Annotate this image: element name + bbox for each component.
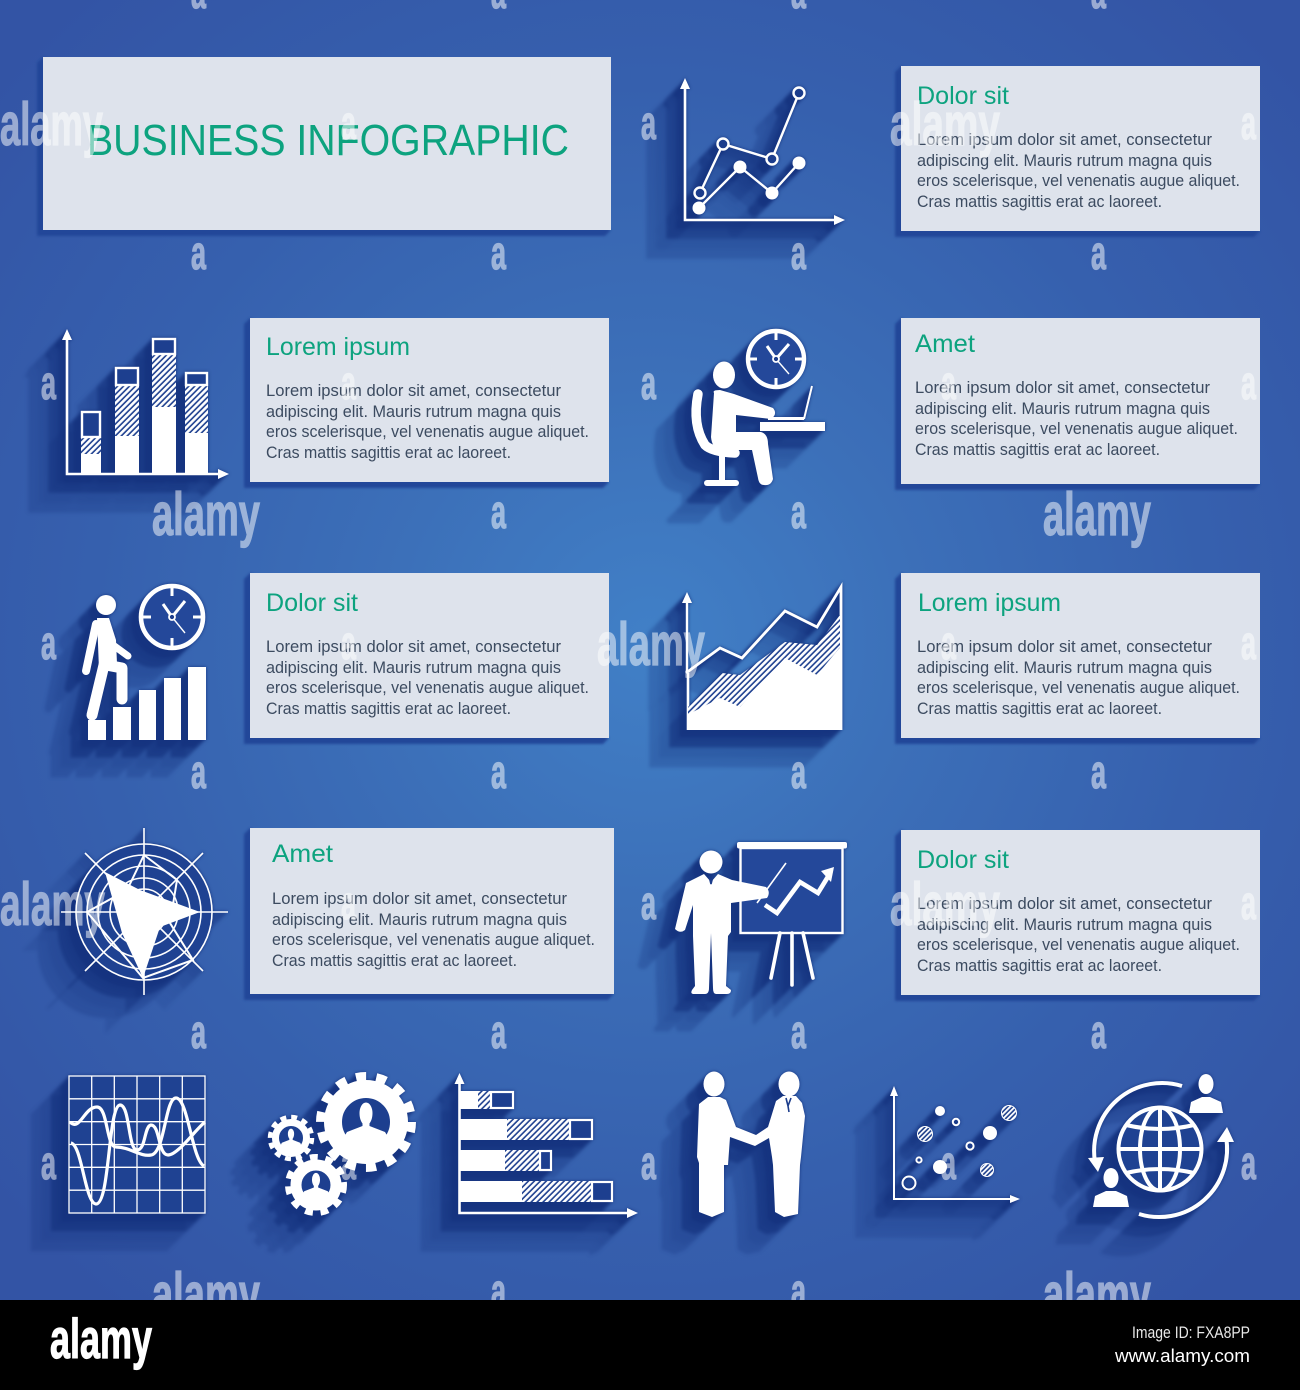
body text: adipiscing elit. Mauris rutrum magna quis: [272, 911, 567, 929]
body text: eros scelerisque, vel venenatis augue aliquet.: [917, 679, 1240, 697]
panel: dolor sit bottom right: [895, 830, 1260, 1001]
body text: Cras mattis sagittis erat ac laoreet.: [266, 700, 511, 718]
watermark: stock overlay: a: [341, 356, 356, 409]
body text: eros scelerisque, vel venenatis augue aliquet.: [915, 420, 1238, 438]
watermark: stock overlay: a: [1091, 1005, 1106, 1058]
body text: eros scelerisque, vel venenatis augue aliquet.: [917, 936, 1240, 954]
body text: [917, 638, 1240, 718]
icon: presenter with flip chart: [675, 842, 847, 994]
watermark: stock overlay: alamy: [152, 481, 260, 548]
body text: eros scelerisque, vel venenatis augue aliquet.: [266, 423, 589, 441]
panel: lorem ipsum right: [895, 573, 1260, 744]
body text: adipiscing elit. Mauris rutrum magna quis: [266, 403, 561, 421]
icon: line chart: [680, 78, 845, 225]
body text: Lorem ipsum dolor sit amet, consectetur: [917, 638, 1212, 656]
watermark: stock overlay: a: [1241, 1136, 1256, 1189]
heading: Dolor sit: [917, 82, 1009, 110]
icon: globe with people: [1088, 1074, 1234, 1217]
watermark: stock overlay: alamy: [597, 611, 705, 678]
watermark: stock overlay: alamy: [1043, 481, 1151, 548]
watermark: stock overlay: a: [1241, 616, 1256, 669]
watermark: stock overlay: a: [491, 226, 506, 279]
watermark: stock overlay: a: [191, 226, 206, 279]
watermark: stock overlay: a: [941, 616, 956, 669]
body text: Cras mattis sagittis erat ac laoreet.: [917, 700, 1162, 718]
watermark: stock overlay: a: [641, 876, 656, 929]
watermark: stock overlay: a: [491, 1264, 506, 1317]
watermark: stock overlay: a: [941, 356, 956, 409]
icon: oscilloscope grid: [69, 1076, 205, 1213]
watermark: stock overlay: a: [191, 1005, 206, 1058]
body text: Cras mattis sagittis erat ac laoreet.: [915, 441, 1160, 459]
body text: Lorem ipsum dolor sit amet, consectetur: [272, 890, 567, 908]
watermark: stock overlay: a: [491, 745, 506, 798]
body text: eros scelerisque, vel venenatis augue aliquet.: [266, 679, 589, 697]
body text: [266, 638, 589, 718]
watermark: stock overlay: a: [341, 96, 356, 149]
body text: Lorem ipsum dolor sit amet, consectetur: [915, 379, 1210, 397]
panel: amet left: [244, 828, 614, 1000]
body text: adipiscing elit. Mauris rutrum magna quis: [917, 659, 1212, 677]
watermark: stock overlay: a: [41, 1136, 56, 1189]
watermark: stock overlay: alamy: [152, 1261, 260, 1328]
icon: horizontal bar chart: [454, 1073, 638, 1218]
heading: Dolor sit: [266, 589, 358, 617]
image id: Image ID: FXA8PP: [1132, 1323, 1250, 1342]
icon: area chart: [682, 587, 842, 730]
watermark: stock overlay: a: [341, 876, 356, 929]
body text: Lorem ipsum dolor sit amet, consectetur: [266, 638, 561, 656]
icon: scatter chart: [890, 1086, 1020, 1203]
watermark: stock overlay: a: [1091, 226, 1106, 279]
body text: [915, 379, 1238, 459]
gear: medium: [288, 1157, 344, 1213]
icon: stacked bar chart: [62, 329, 229, 479]
watermark: stock overlay: alamy: [890, 871, 1000, 938]
watermark: stock overlay: a: [791, 485, 806, 538]
watermark: stock overlay: a: [641, 96, 656, 149]
icon: person at desk with clock: [696, 331, 825, 485]
panel: title: [37, 57, 611, 236]
icon: radar chart: [61, 828, 228, 995]
website: www.alamy.com: [1114, 1346, 1250, 1366]
heading: Dolor sit: [917, 846, 1009, 874]
watermark: stock overlay: a: [791, 1005, 806, 1058]
gear: small: [270, 1117, 312, 1159]
watermark: stock overlay: a: [641, 356, 656, 409]
watermark: stock overlay: alamy: [890, 91, 1000, 158]
watermark: stock overlay: a: [41, 616, 56, 669]
watermark: stock overlay: a: [491, 485, 506, 538]
body text: [917, 131, 1240, 211]
body text: [917, 895, 1240, 975]
body text: [272, 890, 595, 970]
watermark: stock overlay: a: [1241, 96, 1256, 149]
heading: Lorem ipsum: [266, 333, 410, 361]
icon: climbing man with clock: [86, 586, 206, 740]
watermark: stock overlay: a: [1241, 876, 1256, 929]
body text: [266, 382, 589, 462]
body text: adipiscing elit. Mauris rutrum magna quis: [915, 400, 1210, 418]
watermark: stock overlay: a: [41, 356, 56, 409]
watermark: stock overlay: a: [1241, 356, 1256, 409]
panel: dolor sit top right: [895, 66, 1260, 237]
heading: Amet: [915, 330, 975, 358]
watermark: stock overlay: a: [341, 616, 356, 669]
heading: Amet: [272, 840, 333, 868]
title: BUSINESS INFOGRAPHIC: [87, 116, 569, 165]
body text: Lorem ipsum dolor sit amet, consectetur: [917, 131, 1212, 149]
body text: adipiscing elit. Mauris rutrum magna quis: [917, 916, 1212, 934]
watermark: stock overlay: a: [941, 1136, 956, 1189]
watermark: stock overlay: alamy: [0, 871, 105, 938]
body text: adipiscing elit. Mauris rutrum magna quis: [266, 659, 561, 677]
watermark: stock overlay: a: [641, 1136, 656, 1189]
footer bar: [0, 1300, 1300, 1390]
panel: lorem ipsum left: [244, 318, 609, 488]
body text: adipiscing elit. Mauris rutrum magna quis: [917, 152, 1212, 170]
body text: Cras mattis sagittis erat ac laoreet.: [917, 193, 1162, 211]
watermark: stock overlay: a: [1091, 745, 1106, 798]
body text: eros scelerisque, vel venenatis augue aliquet.: [917, 172, 1240, 190]
watermark: stock overlay: a: [491, 1005, 506, 1058]
gear: large: [320, 1076, 412, 1168]
watermark: stock overlay: a: [341, 1136, 356, 1189]
watermark: stock overlay: a: [191, 745, 206, 798]
heading: Lorem ipsum: [918, 589, 1061, 617]
body text: Cras mattis sagittis erat ac laoreet.: [272, 952, 517, 970]
body text: Cras mattis sagittis erat ac laoreet.: [266, 444, 511, 462]
watermark: stock overlay: a: [791, 1264, 806, 1317]
body text: Lorem ipsum dolor sit amet, consectetur: [266, 382, 561, 400]
watermark: stock overlay: alamy: [0, 91, 103, 158]
footer logo: alamy: [50, 1307, 152, 1370]
watermark: stock overlay: a: [791, 226, 806, 279]
panel: dolor sit left: [244, 573, 609, 744]
icon: gears with people: [270, 1076, 412, 1213]
icon: handshake: [697, 1072, 805, 1217]
body text: Lorem ipsum dolor sit amet, consectetur: [917, 895, 1212, 913]
panel: amet right: [895, 318, 1260, 490]
body text: eros scelerisque, vel venenatis augue aliquet.: [272, 931, 595, 949]
body text: Cras mattis sagittis erat ac laoreet.: [917, 957, 1162, 975]
watermark: stock overlay: alamy: [1043, 1261, 1151, 1328]
watermark: stock overlay: a: [791, 745, 806, 798]
